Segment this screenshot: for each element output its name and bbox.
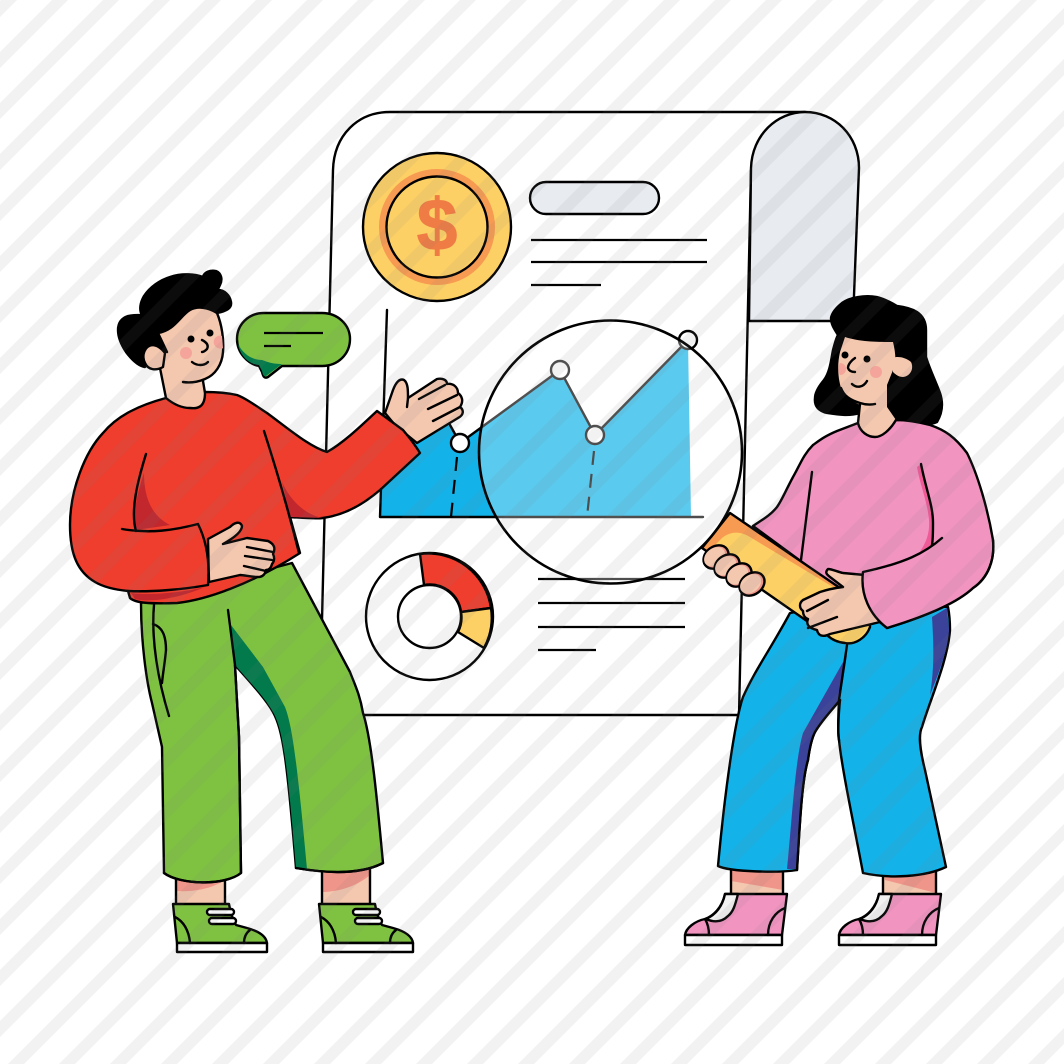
man ear	[143, 345, 165, 369]
man sleeve cuff	[122, 524, 209, 591]
icon: dollar coin	[363, 153, 511, 301]
man lower hand	[208, 523, 274, 582]
woman left hand fingers	[699, 540, 769, 601]
figure: woman	[685, 296, 993, 945]
magnifying glass handle	[702, 513, 870, 643]
document sheet	[322, 112, 805, 715]
figure: man	[70, 271, 463, 952]
woman hair back	[815, 296, 942, 425]
woman ear	[893, 357, 912, 377]
panel: report document	[322, 112, 859, 715]
speech bubble	[237, 313, 350, 378]
area chart	[380, 310, 703, 517]
text lines top	[531, 240, 707, 285]
donut chart	[366, 553, 493, 680]
woman legs and ankles	[731, 868, 936, 895]
man hair	[118, 271, 231, 367]
text lines bottom	[538, 579, 685, 650]
man green trousers	[141, 563, 383, 882]
man legs and ankles	[176, 868, 370, 905]
woman left shoe	[685, 894, 787, 945]
icon: dollar coin: $	[417, 185, 457, 266]
woman pink sweater	[753, 420, 993, 628]
man red sweater	[70, 392, 420, 603]
woman right shoe	[839, 894, 941, 945]
woman right hand	[800, 569, 880, 636]
heading placeholder pill	[530, 182, 659, 214]
man raised hand	[385, 379, 463, 443]
icon: scroll roll	[749, 112, 859, 321]
man neck and face	[118, 271, 231, 408]
man left shoe	[173, 904, 267, 952]
man right shoe	[319, 904, 413, 952]
woman blue trousers	[718, 600, 950, 876]
woman sleeve	[862, 500, 993, 628]
woman neck and face	[838, 337, 912, 437]
magnifying glass lens	[479, 320, 742, 584]
